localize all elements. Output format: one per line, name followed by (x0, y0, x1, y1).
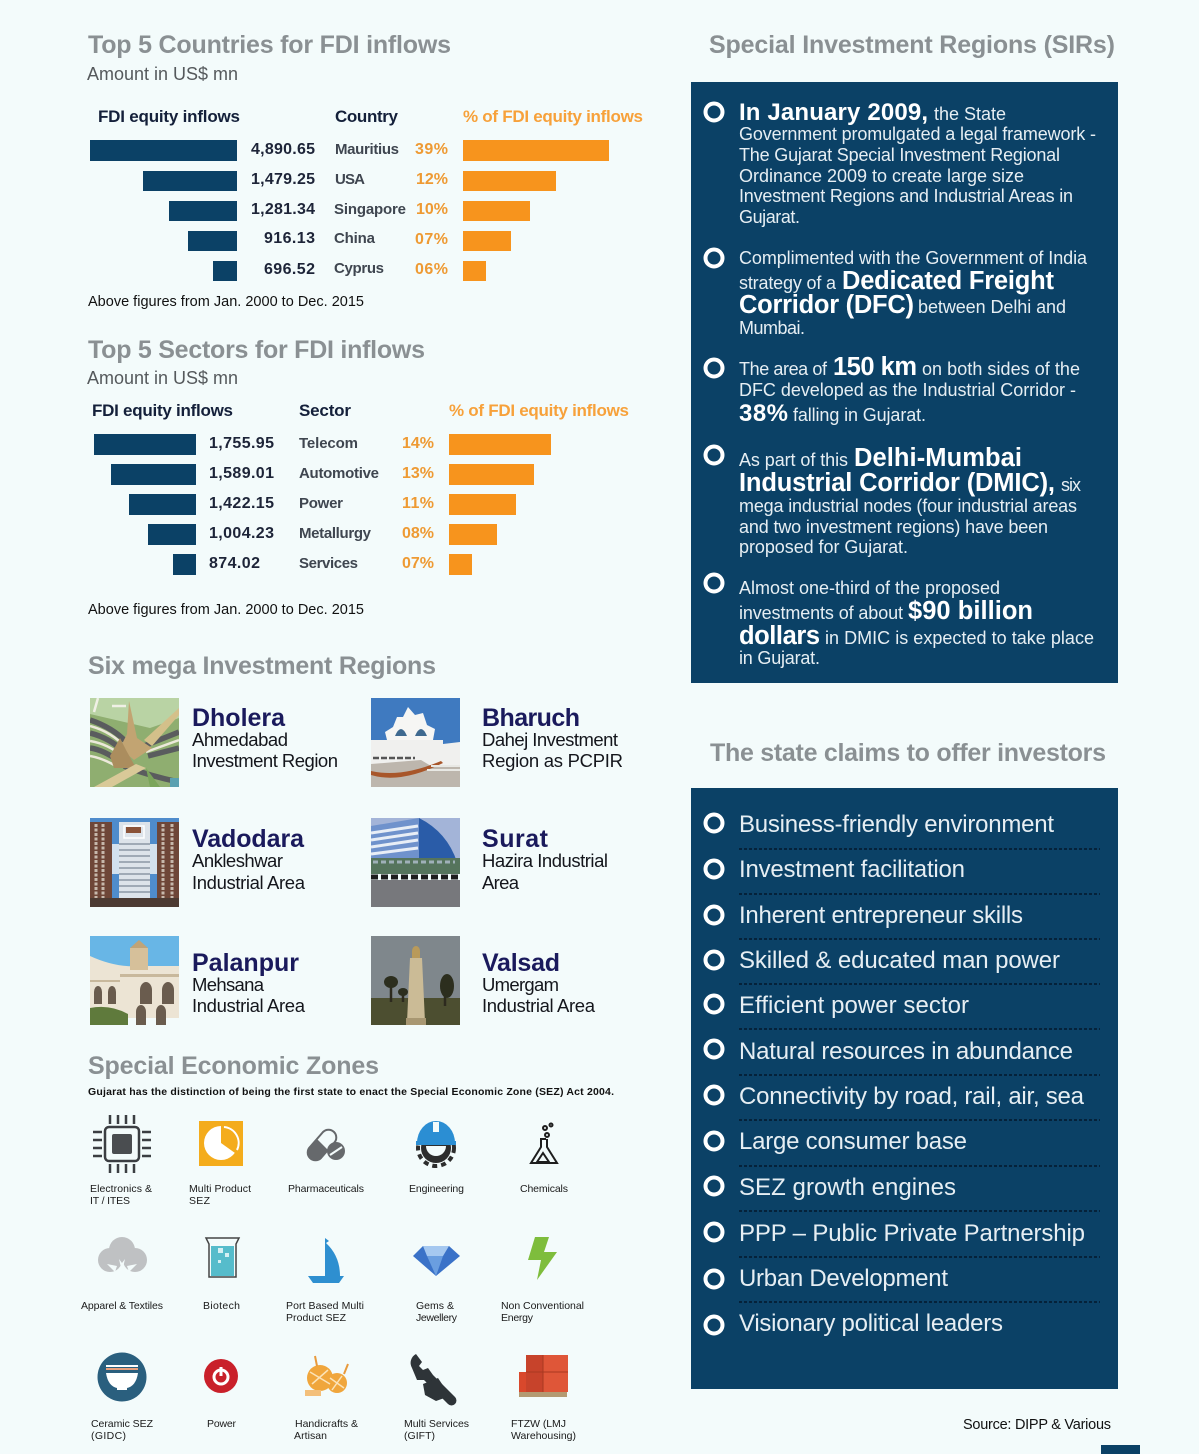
panel: investor offerings (691, 788, 1118, 1389)
bullet point: 150 km: 150 km (833, 353, 917, 381)
name: Palanpur: Palanpur (192, 949, 299, 977)
bar chart: FDI equity inflows by country (90, 140, 237, 281)
sector names: Power (299, 495, 343, 512)
icon: chemicals flask (531, 1124, 557, 1163)
icon: port sailboat (308, 1238, 344, 1283)
label: electronics (90, 1183, 152, 1207)
panel: special economic zones (81, 1052, 614, 1442)
image: Valsad tower (371, 936, 460, 1025)
panel: top 5 countries (87, 31, 643, 310)
label: multi product: Multi Product (189, 1183, 251, 1195)
label: multi services (404, 1418, 469, 1442)
bullet point: January 2009: The Gujarat Special Investment Regional (739, 145, 1060, 165)
bullet point: Delhi-Mumbai Industrial Corridor: proposed for Gujarat. (739, 537, 908, 557)
sector names: Services (299, 555, 358, 572)
bullet point: January 2009: Gujarat. (739, 207, 800, 227)
subheading: sector amount unit: Amount in US$ mn (87, 368, 238, 388)
bar chart: percent of FDI by sector (449, 434, 551, 575)
column headers: FDI equity inflows (98, 107, 240, 126)
values: FDI inflows by sector: 1,589.01 (209, 465, 274, 482)
label: energy: Energy (501, 1312, 534, 1324)
sector names: Automotive (299, 465, 379, 482)
label: biotech: Biotech (203, 1300, 240, 1312)
values: FDI inflows by country: 916.13 (264, 230, 315, 247)
name: Vadodara: Vadodara (192, 825, 305, 853)
heading: special investment regions: Special Investment Regions (SIRs) (709, 31, 1115, 59)
label: port: Port Based Multi (286, 1300, 364, 1312)
region: Palanpur (90, 936, 306, 1025)
label: multi product: SEZ (189, 1195, 211, 1207)
bullet point: January 2009: the State (934, 104, 1006, 124)
percentages by sector: 13% (402, 465, 434, 482)
description: Surat (482, 850, 608, 893)
note: sector period: Above figures from Jan. 2000 to Dec. 2015 (88, 602, 364, 618)
description: Vadodara: Ankleshwar (192, 850, 283, 871)
label: electronics: IT / ITES (90, 1195, 130, 1207)
country names: Mauritius (335, 141, 399, 158)
description: Dholera: Ahmedabad (192, 729, 288, 750)
label: gems: Gems & (416, 1300, 454, 1312)
image: Dholera aerial view (90, 698, 179, 787)
values: FDI inflows by sector: 1,004.23 (209, 525, 274, 542)
panel: top 5 sectors (87, 336, 629, 618)
percentages by country: 10% (416, 201, 448, 218)
label: apparel: Apparel & Textiles (81, 1300, 163, 1312)
description: Dholera: Investment Region (192, 750, 338, 771)
values: FDI inflows by country: 1,479.25 (251, 171, 315, 188)
description: Palanpur: Mehsana (192, 974, 265, 995)
percentages by sector: 07% (402, 555, 434, 572)
name: Dholera: Dholera (192, 704, 286, 732)
label: gems: Jewellery (416, 1312, 458, 1324)
description: Vadodara (192, 850, 306, 893)
bullet point: 90 billion dollars: $90 billion (908, 597, 1033, 625)
source note: Source: DIPP & Various (963, 1417, 1111, 1433)
bullet point: 90 billion dollars: Almost one-third of the proposed (739, 578, 1000, 598)
bullet point: Dedicated Freight Corridor: Complimented with the Government of India (739, 248, 1088, 268)
region: Bharuch (371, 698, 623, 787)
bullet point: Delhi-Mumbai Industrial Corridor: and two investment regions) have been (739, 517, 1048, 537)
heading: top 5 countries: Top 5 Countries for FDI inflows (88, 31, 451, 59)
list item: entrepreneur skills: Inherent entrepreneur skills (739, 902, 1023, 929)
icon: pharmaceuticals capsule (308, 1130, 345, 1160)
icon: multi services wrench (411, 1354, 456, 1405)
icon: electronics chip (93, 1115, 151, 1173)
sector names: Metallurgy (299, 525, 372, 542)
bullet point: Delhi-Mumbai Industrial Corridor: As part of this (739, 450, 848, 470)
region: Valsad (371, 936, 596, 1025)
icon: gem diamond (413, 1246, 460, 1276)
label: chemicals: Chemicals (520, 1183, 568, 1195)
country names: Cyprus (334, 260, 384, 277)
image: Vadodara towers (90, 818, 179, 907)
percentages by country (415, 141, 448, 278)
subheading: amount unit: Amount in US$ mn (87, 64, 238, 84)
bullet point: Dedicated Freight Corridor: Dedicated Freight (842, 267, 1054, 295)
country names (334, 141, 406, 277)
heading: top 5 sectors: Top 5 Sectors for FDI inflows (88, 336, 425, 364)
list item: political leaders: Visionary political leaders (739, 1310, 1003, 1337)
percentages by country: 07% (415, 231, 448, 248)
label: energy: Non Conventional (501, 1300, 584, 1312)
description: Valsad (482, 974, 596, 1016)
icon: power button (204, 1359, 238, 1393)
label: ceramic (91, 1418, 154, 1442)
list item: skilled man power: Skilled & educated man power (739, 947, 1060, 974)
percentages by country: 12% (416, 171, 448, 188)
list item: connectivity: Connectivity by road, rail, air, sea (739, 1083, 1085, 1110)
footer tab (1101, 1445, 1140, 1454)
bullet point: January 2009: In January 2009, (739, 99, 928, 126)
label: engineering: Engineering (409, 1183, 464, 1195)
name: Surat: Surat (482, 825, 549, 853)
list item: business friendly: Business-friendly environment (739, 811, 1054, 838)
country names: Singapore (334, 201, 406, 218)
bullet point: January 2009 (706, 99, 1096, 227)
values: FDI inflows by country: 1,281.34 (251, 201, 315, 218)
icon: biotech beaker (206, 1238, 239, 1277)
icon: engineering helmet and gear (416, 1121, 456, 1166)
region: Surat (371, 818, 608, 907)
label: port (286, 1300, 364, 1324)
label: multi product (189, 1183, 251, 1207)
image: Surat curved building (371, 818, 460, 907)
sector column headers: Sector (299, 401, 351, 420)
bar chart: FDI equity inflows by sector (94, 434, 196, 575)
bullet point: Dedicated Freight Corridor: Mumbai. (739, 318, 805, 338)
bullet point: Dedicated Freight Corridor: strategy of a (739, 273, 837, 293)
bullet point: 90 billion dollars: in Gujarat. (739, 648, 820, 668)
bullet point: Delhi-Mumbai Industrial Corridor: Delhi-Mumbai (854, 444, 1022, 472)
image: Bharuch white building (371, 698, 460, 787)
country names: China (334, 230, 376, 247)
list item: PPP: PPP – Public Private Partnership (739, 1220, 1085, 1247)
bullet point: Delhi-Mumbai Industrial Corridor: six (1061, 475, 1081, 495)
bullet point: 150 km: The area of (739, 359, 828, 379)
label: electronics: Electronics & (90, 1183, 152, 1195)
bullet point: 150 km: falling in Gujarat. (793, 405, 926, 425)
bullet point: 90 billion dollars (706, 574, 1094, 668)
note: period: Above figures from Jan. 2000 to Dec. 2015 (88, 294, 364, 310)
column headers: Country (335, 107, 399, 126)
percentages by country: 06% (415, 261, 448, 278)
icon: energy bolt (528, 1237, 557, 1280)
column headers (98, 107, 643, 126)
icon: multi product pie (199, 1121, 243, 1166)
bullet point: Dedicated Freight Corridor (706, 248, 1088, 338)
sector column headers (92, 401, 629, 420)
label: power: Power (207, 1418, 236, 1430)
bullet point: Dedicated Freight Corridor: Corridor (DFC) (739, 291, 914, 319)
percentages by country: 39% (415, 141, 448, 158)
region: Vadodara (90, 818, 306, 907)
bullet point: January 2009: Investment Regions and Industrial Areas in (739, 186, 1073, 206)
list item: natural resources: Natural resources in abundance (739, 1038, 1073, 1065)
sector column headers: FDI equity inflows (92, 401, 233, 420)
description: Palanpur: Industrial Area (192, 995, 306, 1016)
description: Bharuch: Dahej Investment (482, 729, 618, 750)
label: pharmaceuticals: Pharmaceuticals (288, 1183, 364, 1195)
percentages by sector: 08% (402, 525, 434, 542)
bullet point: 90 billion dollars: dollars (739, 622, 820, 650)
label: handicrafts: Handicrafts & (295, 1418, 358, 1430)
bullet point: 150 km: DFC developed as the Industrial Corridor - (739, 380, 1076, 400)
values: FDI inflows by sector: 874.02 (209, 555, 260, 572)
name: Bharuch: Bharuch (482, 704, 580, 732)
values: FDI inflows by sector: 1,755.95 (209, 435, 274, 452)
description: Valsad: Industrial Area (482, 995, 596, 1016)
description: Surat: Hazira Industrial (482, 850, 608, 871)
panel: six mega investment regions (88, 652, 623, 1025)
bullet point: Delhi-Mumbai Industrial Corridor: Industrial Corridor (DMIC), (739, 469, 1055, 497)
bullet point: 150 km: 38% (739, 400, 788, 427)
list item: investment facilitation: Investment facilitation (739, 856, 965, 883)
icon: warehousing boxes (519, 1355, 568, 1397)
label: multi services: Multi Services (404, 1418, 469, 1430)
label: warehousing: FTZW (LMJ (511, 1418, 566, 1430)
intro text: SEZ Act: Gujarat has the distinction of being the first state to enact the Special Economic Zone (SEZ) Act 2004. (88, 1086, 614, 1098)
icon: handicrafts yarn (305, 1356, 348, 1396)
list item: SEZ growth engines: SEZ growth engines (739, 1174, 956, 1201)
values: FDI inflows by sector (209, 435, 274, 572)
label: warehousing: Warehousing) (511, 1430, 576, 1442)
label: multi services: (GIFT) (404, 1430, 435, 1442)
values: FDI inflows by country (251, 141, 315, 278)
label: energy (501, 1300, 584, 1324)
panel: special investment regions (691, 82, 1118, 683)
description: Vadodara: Industrial Area (192, 872, 306, 893)
label: ceramic: Ceramic SEZ (91, 1418, 154, 1430)
description: Bharuch: Region as PCPIR (482, 750, 623, 771)
values: FDI inflows by country: 696.52 (264, 261, 315, 278)
heading: six mega investment regions: Six mega Investment Regions (88, 652, 436, 680)
column headers: % of FDI equity inflows (463, 107, 643, 126)
values: FDI inflows by sector: 1,422.15 (209, 495, 274, 512)
sector names (299, 435, 379, 572)
bullet point: Delhi-Mumbai Industrial Corridor: mega industrial nodes (four industrial areas (739, 496, 1077, 516)
bullet point: January 2009: Government promulgated a legal framework - (739, 124, 1096, 144)
heading: special economic zones: Special Economic Zones (88, 1052, 379, 1080)
list item: consumer base: Large consumer base (739, 1128, 967, 1155)
list item: power sector: Efficient power sector (739, 992, 969, 1019)
icon: apparel cotton (98, 1237, 147, 1272)
bullet point: Delhi-Mumbai Industrial Corridor (706, 444, 1081, 557)
description: Palanpur (192, 974, 306, 1016)
description: Dholera (192, 729, 338, 771)
label: ceramic: (GIDC) (91, 1430, 126, 1442)
bullet point: 90 billion dollars: investments of about (739, 603, 903, 623)
percentages by sector: 11% (402, 495, 434, 512)
bullet point: 150 km: on both sides of the (922, 359, 1080, 379)
sector column headers: % of FDI equity inflows (449, 401, 629, 420)
bullet point: 150 km (706, 353, 1080, 427)
list item: urban development: Urban Development (739, 1265, 948, 1292)
bullet point: Dedicated Freight Corridor: between Delhi and (918, 297, 1066, 317)
name: Valsad: Valsad (482, 949, 560, 977)
description: Surat: Area (482, 872, 520, 893)
icon: ceramic bowl (98, 1352, 146, 1402)
heading: state claims: The state claims to offer investors (710, 739, 1106, 767)
bullet point: 90 billion dollars: in DMIC is expected to take place (825, 628, 1094, 648)
region: Dholera (90, 698, 338, 787)
description: Valsad: Umergam (482, 974, 559, 995)
country names: USA (335, 171, 365, 188)
label: warehousing (511, 1418, 576, 1442)
bullet point: January 2009: Ordinance 2009 to create large size (739, 166, 1024, 186)
description: Bharuch (482, 729, 623, 771)
percentages by sector (402, 435, 434, 572)
label: port: Product SEZ (286, 1312, 347, 1324)
label: handicrafts (294, 1418, 358, 1442)
bar chart: percent of FDI by country (463, 140, 609, 281)
values: FDI inflows by country: 4,890.65 (251, 141, 315, 158)
percentages by sector: 14% (402, 435, 434, 452)
image: Palanpur palace (90, 936, 179, 1025)
label: handicrafts: Artisan (294, 1430, 327, 1442)
sector names: Telecom (299, 435, 358, 452)
label: gems (416, 1300, 458, 1324)
